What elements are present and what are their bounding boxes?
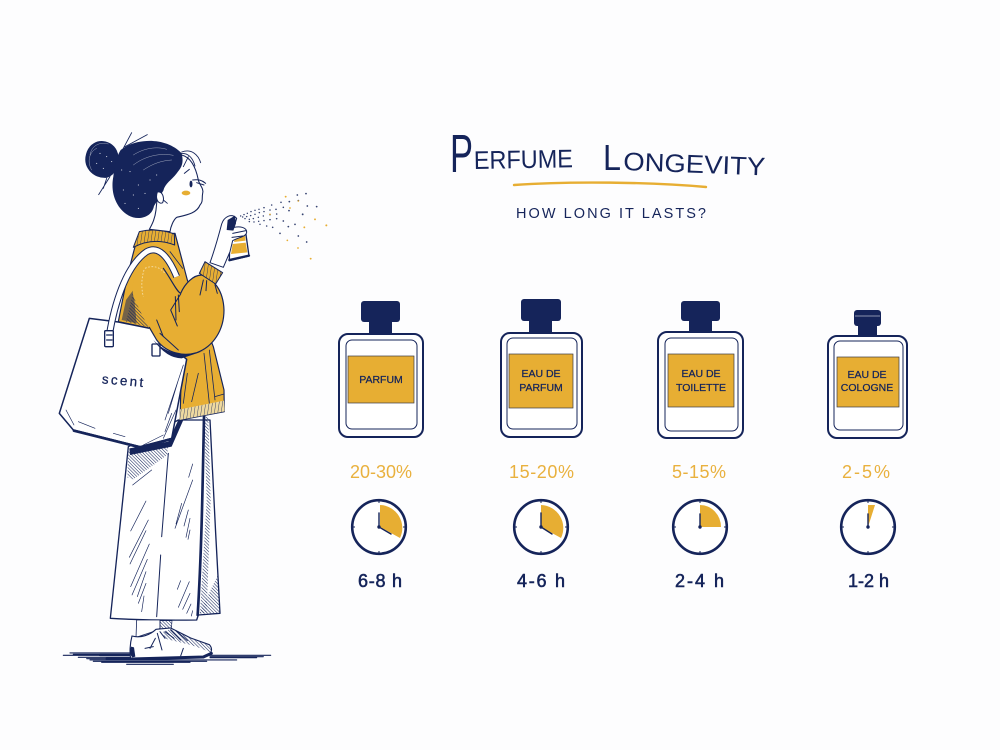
duration: 6-8 h: 6-8 h [358, 571, 402, 591]
title: ERFUME [474, 145, 573, 175]
concentration: 20-30%: 20-30% [350, 462, 412, 482]
title: L [603, 137, 621, 178]
wide-leg trousers [110, 417, 220, 620]
subtitle: HOW LONG IT LASTS? [516, 206, 706, 222]
bottle: eau de parfum: EAU DE [521, 368, 561, 380]
sweater sleeve [133, 265, 224, 358]
clock: 2-4 h [673, 500, 727, 554]
illustration: woman spraying perfume [59, 133, 327, 664]
bag label: scent: scent [101, 371, 146, 390]
neck and face [149, 155, 206, 232]
bottle: parfum [339, 301, 423, 437]
sweater body [118, 230, 225, 420]
column: eau de toilette [658, 301, 743, 591]
concentration: 15-20%: 15-20% [509, 462, 574, 482]
bottle: eau de parfum [501, 299, 582, 437]
column: eau de parfum [501, 299, 582, 591]
hand holding atomizer [199, 216, 249, 284]
bottle: eau de toilette [658, 301, 743, 438]
title underline [514, 183, 706, 187]
perfume mist [240, 193, 327, 260]
bottle: eau de parfum: PARFUM [519, 382, 563, 394]
title: P [450, 124, 473, 184]
bottle: eau de cologne: COLOGNE [841, 382, 893, 394]
duration: 2-4 h: 2-4 h [675, 571, 724, 591]
tote strap [105, 250, 177, 347]
clock: 6-8 h [352, 500, 406, 554]
sneaker and socks [130, 620, 211, 660]
ground shadow [63, 653, 271, 664]
bottle: eau de cologne [828, 310, 907, 438]
bottle: parfum: PARFUM [359, 374, 403, 386]
bottle: eau de toilette: TOILETTE [676, 382, 726, 394]
tote bag [59, 318, 187, 447]
column: eau de cologne [828, 310, 907, 591]
title [450, 124, 766, 184]
title: ONGEVITY [623, 148, 766, 181]
bottle: eau de toilette: EAU DE [681, 368, 721, 380]
bottle: eau de cologne: EAU DE [847, 369, 887, 381]
clock: 4-6 h [514, 500, 568, 554]
clock: 1-2 h [841, 500, 895, 554]
concentration: 5-15%: 5-15% [672, 462, 726, 482]
concentration: 2-5%: 2-5% [842, 462, 890, 482]
duration: 1-2 h: 1-2 h [848, 571, 889, 591]
column: parfum [339, 301, 423, 591]
hair bun and hair [86, 133, 201, 218]
duration: 4-6 h: 4-6 h [517, 571, 565, 591]
